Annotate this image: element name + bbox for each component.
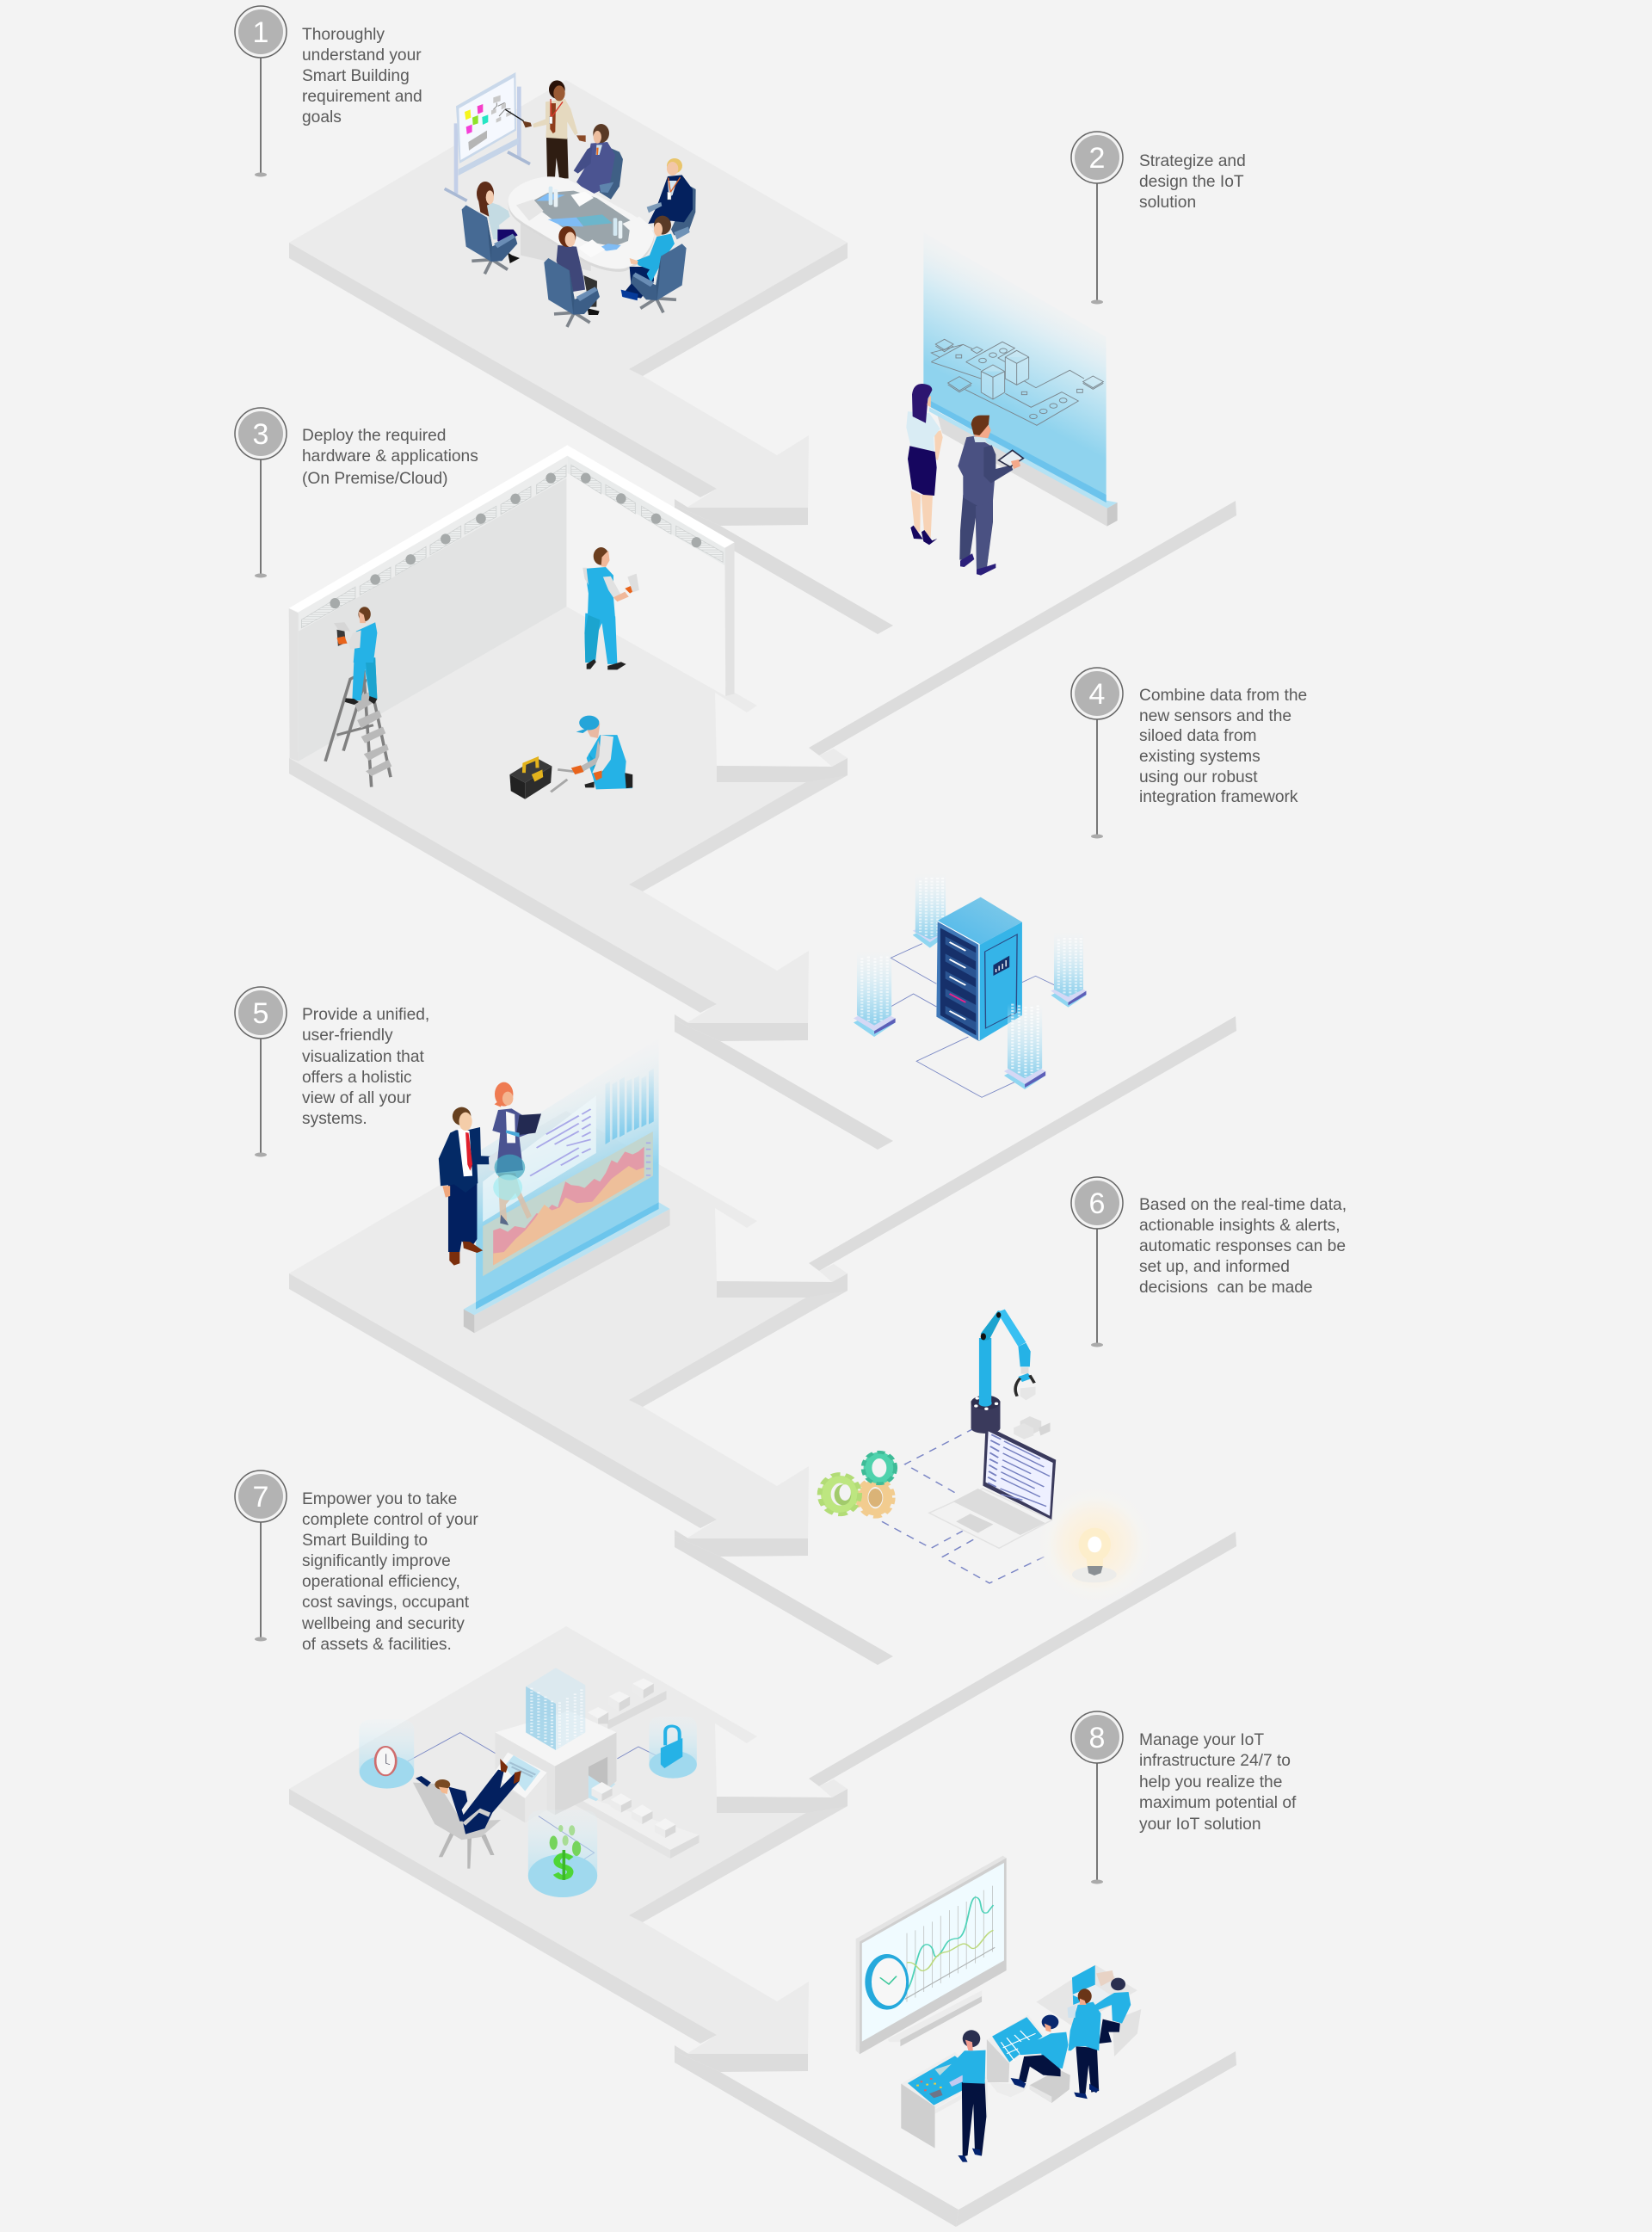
- step 5 description: offers a holistic: [302, 1069, 412, 1087]
- floor path: step 1 platform and arrow: [289, 80, 893, 634]
- seated woman left with chair: [462, 182, 520, 274]
- gears: [820, 1452, 896, 1517]
- toolbox: [509, 758, 552, 799]
- step 7 description: of assets & facilities.: [302, 1636, 452, 1654]
- step 2 description: design the IoT: [1139, 173, 1244, 191]
- step 3 illustration: hardware deployment room: [289, 445, 735, 799]
- clock cylinder: [359, 1719, 414, 1789]
- wall posts: [289, 542, 735, 761]
- step 7 illustration: central control with outcomes: [359, 1668, 699, 1897]
- front console with standing worker: [901, 2030, 988, 2162]
- screen bottom strip: [476, 1202, 659, 1310]
- step 8 description: your IoT solution: [1139, 1816, 1261, 1834]
- robot arm: [971, 1310, 1036, 1434]
- step 7 description: Empower you to take: [302, 1490, 457, 1508]
- step 1 description: requirement and: [302, 88, 422, 106]
- area chart: [483, 1131, 653, 1276]
- step 3 description: hardware & applications: [302, 447, 478, 466]
- floor path: step 8 V-shaped platform edge: [675, 2051, 1236, 2227]
- step 8 description: Manage your IoT: [1139, 1731, 1264, 1749]
- floor path: step 4 stripe into step 5 platform: [289, 1016, 1236, 1665]
- step 6 description: set up, and informed: [1139, 1258, 1290, 1276]
- data tower right: [1051, 932, 1086, 1008]
- step 2 badge: 2: [1089, 142, 1105, 175]
- bar chart: [606, 1069, 654, 1144]
- man in navy suit: [439, 1107, 506, 1266]
- step 7 description: operational efficiency,: [302, 1573, 460, 1591]
- step 5 text and badge: [235, 987, 429, 1156]
- step 5 badge: [235, 987, 287, 1156]
- data tower back: [913, 873, 947, 948]
- step 7 description: Smart Building to: [302, 1532, 428, 1550]
- step 4 text and badge: [1071, 668, 1307, 838]
- step 2 illustration: design screen: [906, 232, 1118, 576]
- step 4 badge: 4: [1089, 678, 1105, 711]
- step 6 badge: 6: [1089, 1187, 1105, 1220]
- step 6 illustration: robot, laptop, gears and bulb: [820, 1310, 1156, 1606]
- seated woman front with chair: [544, 226, 600, 327]
- step 2 description: solution: [1139, 194, 1196, 212]
- holographic screen: [476, 1039, 659, 1310]
- meeting table: [509, 176, 654, 272]
- data tower left: [854, 951, 896, 1037]
- worker standing installing sensor: [583, 547, 639, 669]
- step 7 description: complete control of your: [302, 1511, 478, 1529]
- worker on ladder drilling: [334, 607, 377, 705]
- step 4 description: existing systems: [1139, 748, 1261, 766]
- lock cylinder: [649, 1717, 697, 1779]
- step 4 illustration: server with data sources: [854, 873, 1086, 1097]
- step 8 badge: [1071, 1711, 1123, 1884]
- conveyor belt front: [570, 1768, 699, 1859]
- step 3 badge: [235, 408, 287, 578]
- left wall: [299, 478, 566, 761]
- step 6 description: decisions can be made: [1139, 1279, 1313, 1297]
- step 4 description: integration framework: [1139, 788, 1298, 806]
- step 8 badge: 8: [1089, 1722, 1105, 1754]
- seated man in navy suit with chair: [647, 158, 696, 239]
- step 3 description: (On Premise/Cloud): [302, 470, 448, 488]
- data tower front: [1004, 1004, 1045, 1089]
- step 1 badge: [235, 6, 287, 177]
- step 1 description: goals: [302, 108, 342, 126]
- step 5 description: user-friendly: [302, 1027, 393, 1045]
- presenter: [505, 80, 586, 178]
- whiteboard: [445, 72, 530, 200]
- woman standing: [906, 384, 943, 545]
- screen bottom strip: [931, 401, 1106, 503]
- light bulb with glow: [1033, 1483, 1156, 1606]
- step 8 text and badge: [1071, 1711, 1297, 1884]
- ladder: [325, 672, 391, 787]
- step 4 description: new sensors and the: [1139, 707, 1291, 725]
- standing worker: [1068, 1988, 1100, 2099]
- laptop: [929, 1426, 1056, 1548]
- step 6 badge: [1071, 1177, 1123, 1347]
- step 4 description: siloed data from: [1139, 727, 1257, 745]
- step 8 illustration: operations control room: [856, 1856, 1141, 2162]
- isometric solution diagram: [931, 339, 1103, 425]
- conveyor belt back: [588, 1679, 667, 1729]
- step 7 badge: [235, 1471, 287, 1642]
- server rack: [936, 897, 1022, 1041]
- step 4 description: Combine data from the: [1139, 687, 1307, 705]
- step 1 badge: 1: [253, 16, 268, 49]
- white ceiling band: [289, 445, 735, 612]
- connection lines: [890, 944, 1055, 1097]
- step 8 description: help you realize the: [1139, 1773, 1282, 1791]
- step 7 description: significantly improve: [302, 1552, 451, 1570]
- monitor line chart: [905, 1886, 995, 2002]
- seated man right in blue with chair: [621, 216, 687, 312]
- kneeling worker: [571, 716, 632, 789]
- step 2 badge: [1071, 132, 1123, 305]
- middle desk with seated worker: [987, 2015, 1070, 2103]
- step 2 text and badge: [1071, 132, 1246, 305]
- rear desk with worker: [1036, 1964, 1141, 2056]
- text panel: [483, 1095, 596, 1222]
- step 1 description: Smart Building: [302, 67, 410, 85]
- step 2 description: Strategize and: [1139, 152, 1246, 170]
- relaxed man in chair: [413, 1759, 521, 1869]
- step 6 text and badge: [1071, 1177, 1347, 1347]
- floor path: step 2 stripe into step 3 platform: [289, 501, 1236, 1150]
- screen base: [464, 1202, 670, 1333]
- money cylinder: [528, 1810, 597, 1897]
- step 8 description: infrastructure 24/7 to: [1139, 1752, 1291, 1770]
- console: [492, 1753, 547, 1822]
- stacked blocks: [1014, 1416, 1051, 1440]
- step 5 description: view of all your: [302, 1089, 412, 1107]
- block machine: [495, 1711, 675, 1838]
- data cube: [526, 1668, 585, 1750]
- floor path: step 6 stripe into step 7 platform: [289, 1532, 1236, 2072]
- step 3 description: Deploy the required: [302, 427, 446, 445]
- step 6 description: Based on the real-time data,: [1139, 1196, 1347, 1214]
- step 6 description: actionable insights & alerts,: [1139, 1217, 1341, 1235]
- right wall: [566, 463, 725, 696]
- step 7 badge: 7: [253, 1481, 268, 1514]
- step 5 description: systems.: [302, 1110, 367, 1128]
- dashed connection lines: [882, 1428, 1078, 1583]
- step 3 badge: 3: [253, 418, 268, 451]
- woman with laptop: [492, 1082, 541, 1225]
- step 4 badge: [1071, 668, 1123, 838]
- step 7 text and badge: [235, 1471, 478, 1654]
- wrenches: [551, 769, 577, 792]
- ceiling vent bands: [299, 456, 724, 632]
- step 5 description: visualization that: [302, 1048, 425, 1066]
- step 1 description: understand your: [302, 46, 422, 65]
- step 5 description: Provide a unified,: [302, 1006, 429, 1024]
- monitor stand: [888, 1990, 982, 2046]
- step 5 illustration: visualization screen: [439, 1039, 670, 1333]
- step 1 text and badge: [235, 6, 422, 177]
- step 1 description: Thoroughly: [302, 26, 385, 44]
- step 8 description: maximum potential of: [1139, 1794, 1297, 1812]
- step 3 text and badge: [235, 408, 478, 578]
- step 6 description: automatic responses can be: [1139, 1237, 1346, 1255]
- step 1 illustration: meeting around a table: [445, 72, 696, 327]
- step 4 description: using our robust: [1139, 768, 1258, 786]
- holographic blue screen: [923, 232, 1106, 503]
- wall monitor: [856, 1856, 1007, 2054]
- step 7 description: cost savings, occupant: [302, 1594, 470, 1612]
- man standing with tablet: [958, 416, 1023, 576]
- wall clock: [865, 1954, 909, 2010]
- seated man in purple suit with chair: [574, 124, 623, 200]
- step 7 description: wellbeing and security: [301, 1615, 465, 1633]
- screen base: [929, 407, 1118, 527]
- step 5 badge: 5: [253, 997, 268, 1030]
- connection lines: [407, 1733, 656, 1860]
